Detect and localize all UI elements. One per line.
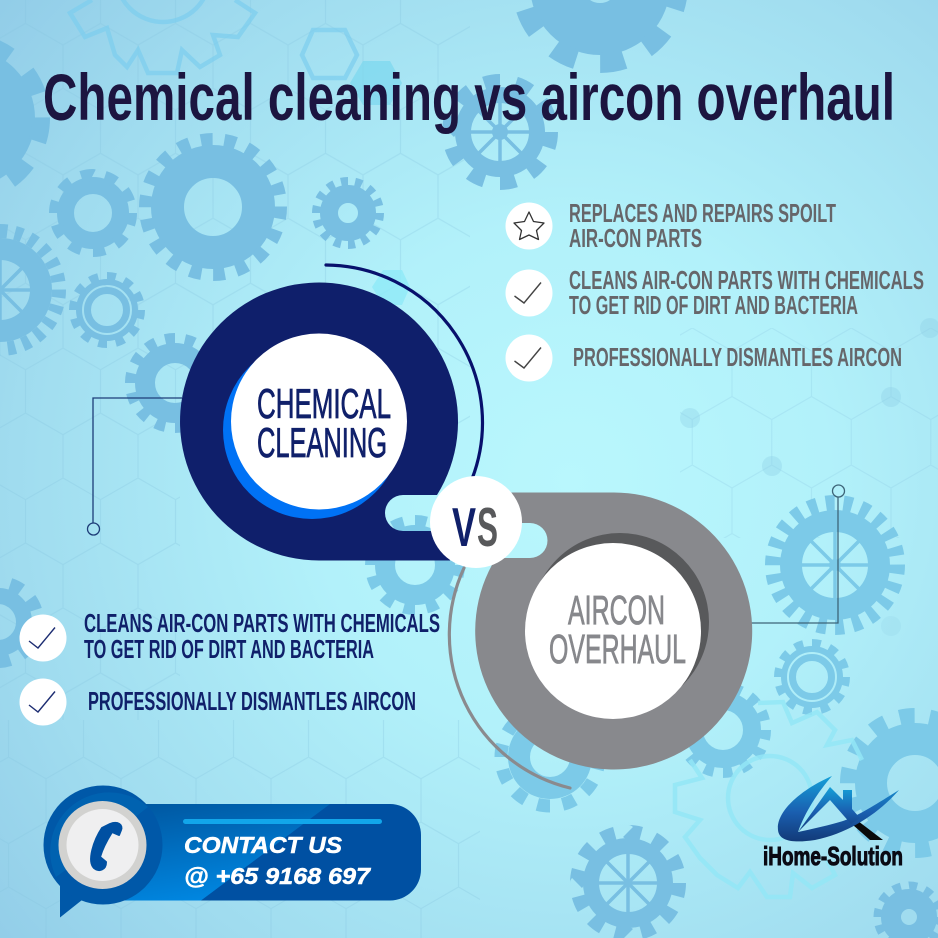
badge: chemical cleaning (180, 283, 458, 560)
icon: phone (58, 801, 146, 889)
list: chemical cleaning features (20, 608, 440, 726)
text: replaces and repairs: AIR-CON PARTS (569, 223, 702, 253)
text: replaces and repairs (569, 198, 836, 253)
text: cleans parts: TO GET RID OF DIRT AND BACTERIA (84, 634, 374, 664)
speech bubble (44, 786, 162, 918)
badge: aircon overhaul: OVERHAUL (549, 626, 686, 672)
icon: check (20, 614, 66, 662)
leader line: aircon overhaul (750, 485, 844, 623)
text: contact us: CONTACT US (184, 832, 343, 858)
vs badge (430, 476, 522, 568)
text: cleans parts: CLEANS AIR-CON PARTS WITH CHEMICALS (84, 608, 440, 638)
accent bar (183, 819, 382, 824)
icon: check (20, 678, 66, 726)
icon: star (506, 202, 552, 250)
icon: check (506, 334, 552, 382)
badge: aircon overhaul (475, 492, 752, 769)
badge: chemical cleaning: CLEANING (257, 419, 387, 466)
icon: check (506, 270, 552, 316)
leader line: chemical cleaning (88, 398, 182, 535)
list: aircon overhaul features (506, 198, 924, 382)
text: dismantles: PROFESSIONALLY DISMANTLES AIRCON (88, 686, 416, 716)
badge: chemical cleaning: CHEMICAL (257, 380, 391, 427)
vs badge: S (477, 496, 498, 558)
logo (763, 776, 903, 871)
arc: aircon overhaul (449, 568, 570, 788)
badge: aircon overhaul: AIRCON (568, 587, 665, 633)
vs badge: V (452, 496, 476, 558)
text: cleans parts (84, 608, 440, 664)
text: cleans parts (569, 265, 924, 320)
arc: chemical cleaning (326, 265, 482, 479)
contact panel (44, 786, 421, 918)
text: phone number: @ +65 9168 697 (184, 863, 371, 889)
